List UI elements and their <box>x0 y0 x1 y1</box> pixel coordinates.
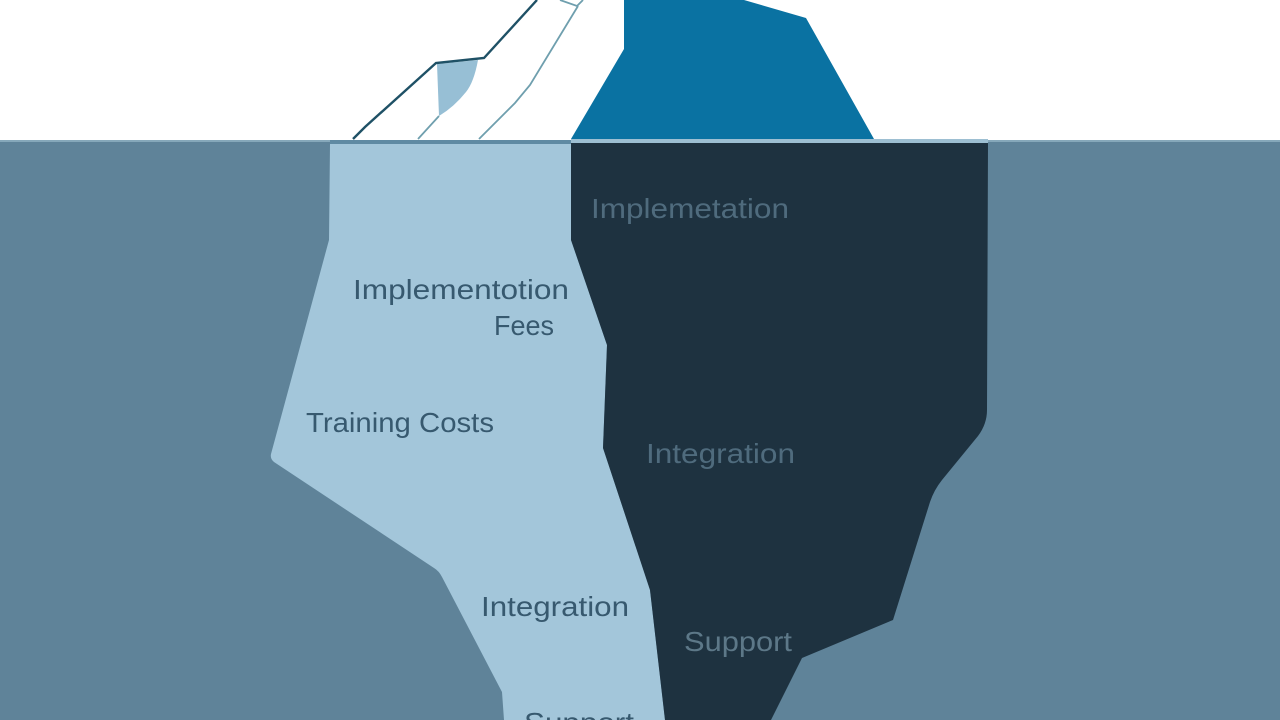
waterline over light ice <box>330 140 571 144</box>
label: Implementation Fees <box>353 274 569 341</box>
label: Integration (light): Integration <box>481 591 629 622</box>
label: Implemetation (dark): Implemetation <box>591 193 789 224</box>
label: Support (dark): Support <box>684 626 792 657</box>
iceberg below water: light section <box>271 144 665 720</box>
iceberg tip: inner ridge lines <box>418 0 583 139</box>
waterline highlight over dark ice <box>571 139 988 143</box>
iceberg tip: dark blue face <box>571 0 874 139</box>
iceberg below water: dark section <box>571 142 988 720</box>
label: Training Costs: Training Costs <box>306 407 494 438</box>
label: Implementation Fees: Fees <box>494 310 554 341</box>
waterline <box>0 140 1280 142</box>
iceberg tip: dark outline <box>353 0 537 139</box>
label: Integration (dark): Integration <box>646 438 795 469</box>
label: Implementation Fees: Implementotion <box>353 274 569 305</box>
iceberg tip: shaded facet <box>437 60 478 116</box>
iceberg above water <box>353 0 874 139</box>
sky background <box>0 0 1280 140</box>
